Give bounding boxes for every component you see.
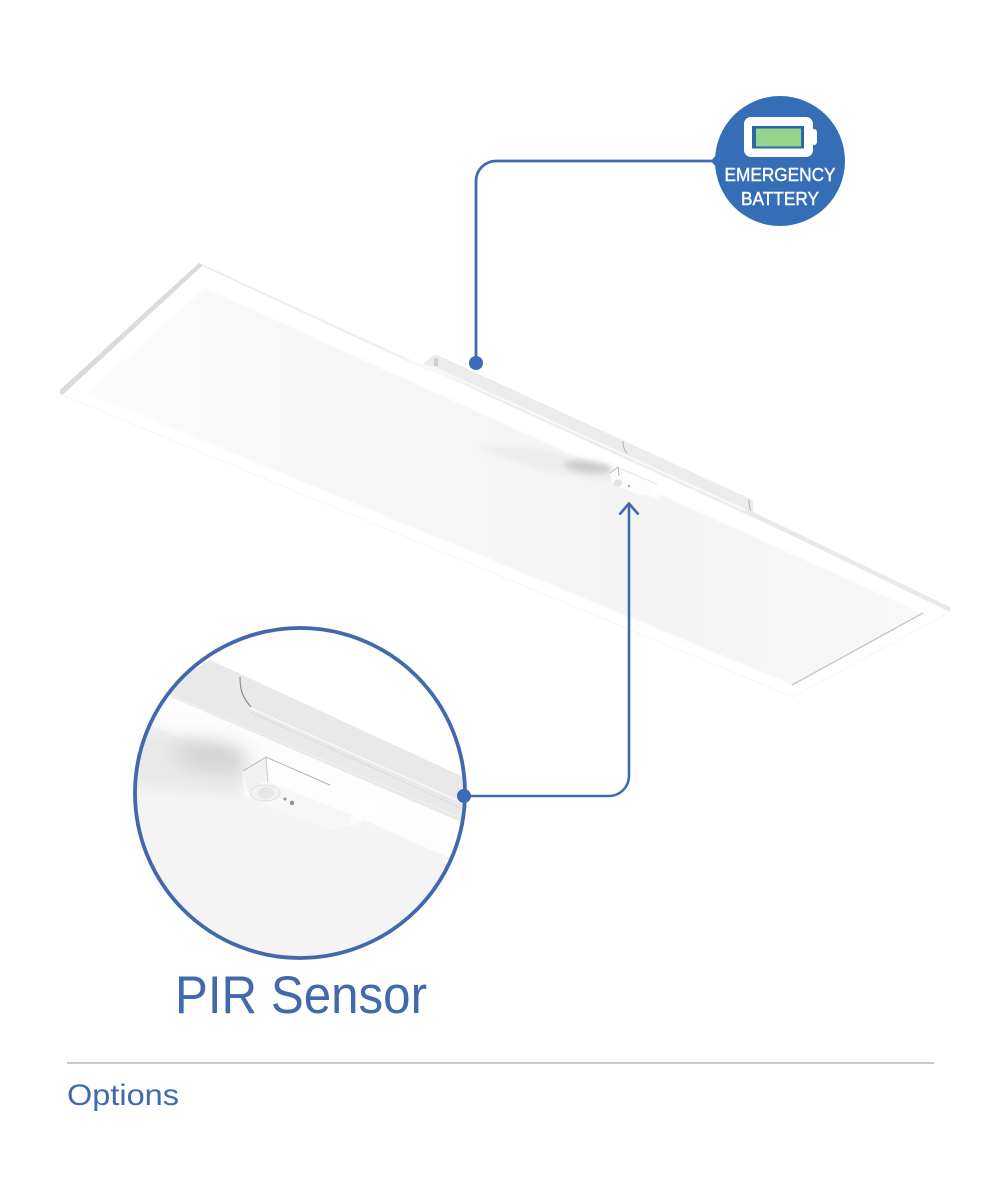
inset lower fade bbox=[250, 782, 350, 832]
panel diffuser bbox=[88, 288, 923, 685]
panel edge top, right of housing bbox=[745, 508, 950, 612]
inset frame band bbox=[372, 822, 450, 858]
inset housing bbox=[160, 660, 470, 826]
panel frame bbox=[60, 263, 950, 697]
inset diffuser bbox=[137, 790, 449, 956]
inset shadow bbox=[138, 731, 238, 790]
badge label bbox=[724, 165, 836, 209]
magnified inset: PIR sensor bbox=[120, 628, 470, 970]
panel edge left bbox=[60, 263, 202, 394]
PIR sensor module bbox=[610, 464, 664, 498]
heading: PIR Sensor: PIR Sensor bbox=[175, 966, 427, 1025]
emergency battery badge bbox=[711, 96, 845, 226]
panel edge top, left of housing bbox=[199, 263, 430, 372]
inset glare bbox=[353, 793, 381, 819]
caption: Options: Options bbox=[67, 1079, 179, 1112]
badge label: BATTERY bbox=[741, 189, 819, 209]
icon: battery bbox=[744, 117, 817, 157]
inner edge highlight bbox=[792, 613, 923, 685]
LED panel illustration bbox=[60, 263, 950, 697]
sensor shadow bbox=[475, 446, 612, 482]
inset sensor module bbox=[242, 756, 358, 829]
connector: battery callout line bbox=[469, 161, 716, 370]
connector: PIR sensor arrow bbox=[457, 504, 638, 803]
rear housing bbox=[423, 354, 753, 519]
badge label: EMERGENCY bbox=[724, 165, 836, 185]
